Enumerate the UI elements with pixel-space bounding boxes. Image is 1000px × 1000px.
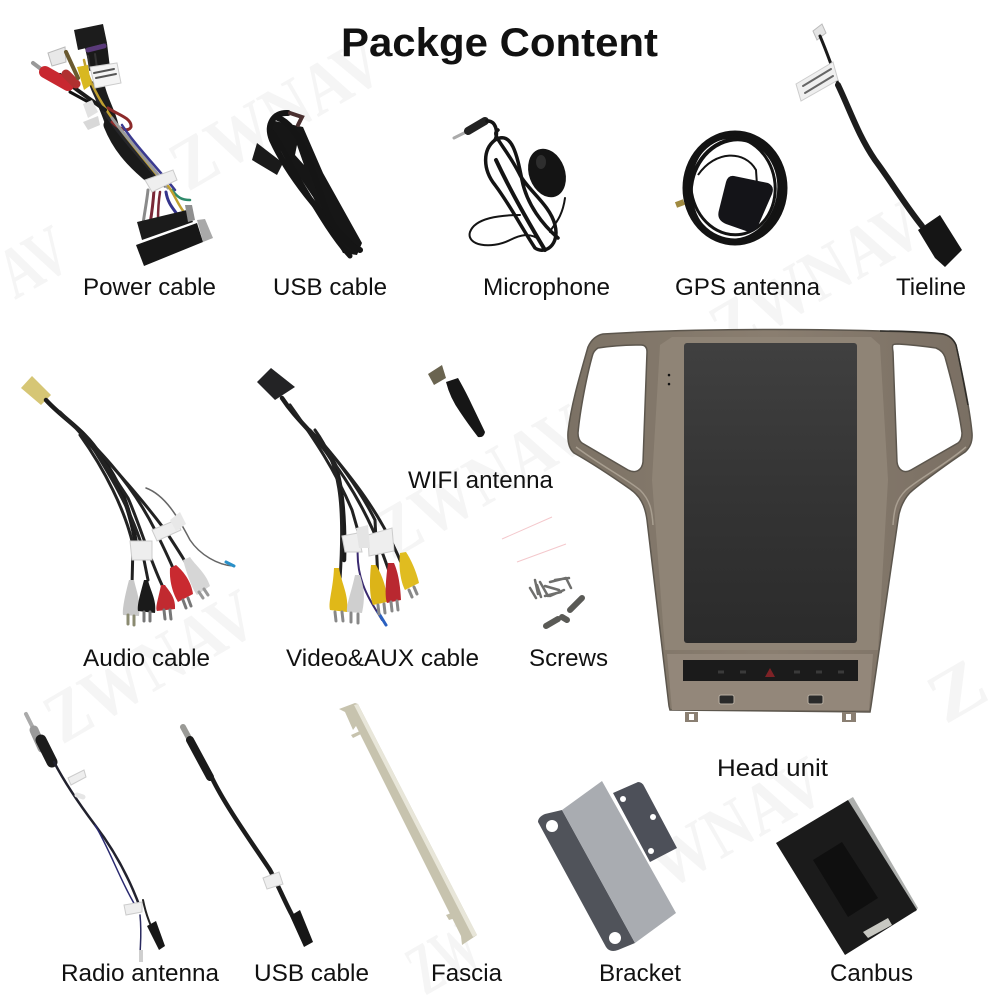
item: wifi antenna [428, 365, 485, 437]
item: fascia [339, 703, 477, 945]
screen bezel [652, 337, 888, 650]
item: video and aux cable [257, 368, 419, 625]
label: bracket: Bracket [599, 960, 681, 987]
label: gps antenna: GPS antenna [675, 274, 821, 301]
watermarks: ZWNAV [360, 389, 601, 574]
hazard button [765, 668, 775, 677]
watermarks: Z [913, 642, 1000, 739]
item: screws [530, 578, 582, 626]
label: video and aux cable: Video&AUX cable [286, 645, 479, 672]
screen [684, 343, 857, 643]
frame dark top edge [880, 331, 968, 405]
frame contour highlight [576, 447, 966, 525]
label: fascia: Fascia [431, 960, 503, 987]
control strip [683, 660, 858, 681]
label: tieline: Tieline [896, 274, 966, 301]
item: power cable [33, 24, 213, 266]
watermarks: ZWNAV [156, 21, 397, 206]
label: power cable: Power cable [83, 274, 216, 301]
label: usb cable 2: USB cable [254, 960, 369, 987]
lower panel [667, 654, 873, 710]
label: wifi antenna: WIFI antenna [408, 467, 554, 494]
label: screws: Screws [529, 645, 608, 672]
label: microphone: Microphone [483, 274, 610, 301]
control icons [718, 670, 844, 674]
watermarks: ZWNAV [30, 574, 271, 759]
label: radio antenna: Radio antenna [61, 960, 220, 987]
item: usb cable [252, 113, 362, 256]
item: head unit [568, 330, 972, 722]
label: audio cable: Audio cable [83, 645, 210, 672]
item: bracket [538, 781, 677, 951]
mount tab left [685, 712, 698, 722]
watermarks: ZWNAV [696, 184, 937, 369]
item: usb cable 2 [183, 727, 313, 947]
watermarks: ZWNAV [598, 741, 839, 926]
item: canbus [776, 797, 918, 955]
item: microphone [454, 121, 572, 250]
item: gps antenna [676, 130, 789, 249]
label: head unit: Head unit [717, 755, 828, 782]
item: radio antenna [26, 714, 165, 962]
label: usb cable 1: USB cable [273, 274, 387, 301]
frame [568, 330, 972, 712]
indicator dots [668, 375, 670, 384]
usb port right [808, 695, 823, 704]
pink hairlines [502, 517, 566, 562]
item: audio cable [21, 376, 234, 625]
mount tab right [842, 712, 856, 722]
label: canbus: Canbus [830, 960, 913, 987]
item: tieline [796, 24, 962, 267]
title: Packge Content [341, 21, 658, 65]
usb port left [719, 695, 734, 704]
